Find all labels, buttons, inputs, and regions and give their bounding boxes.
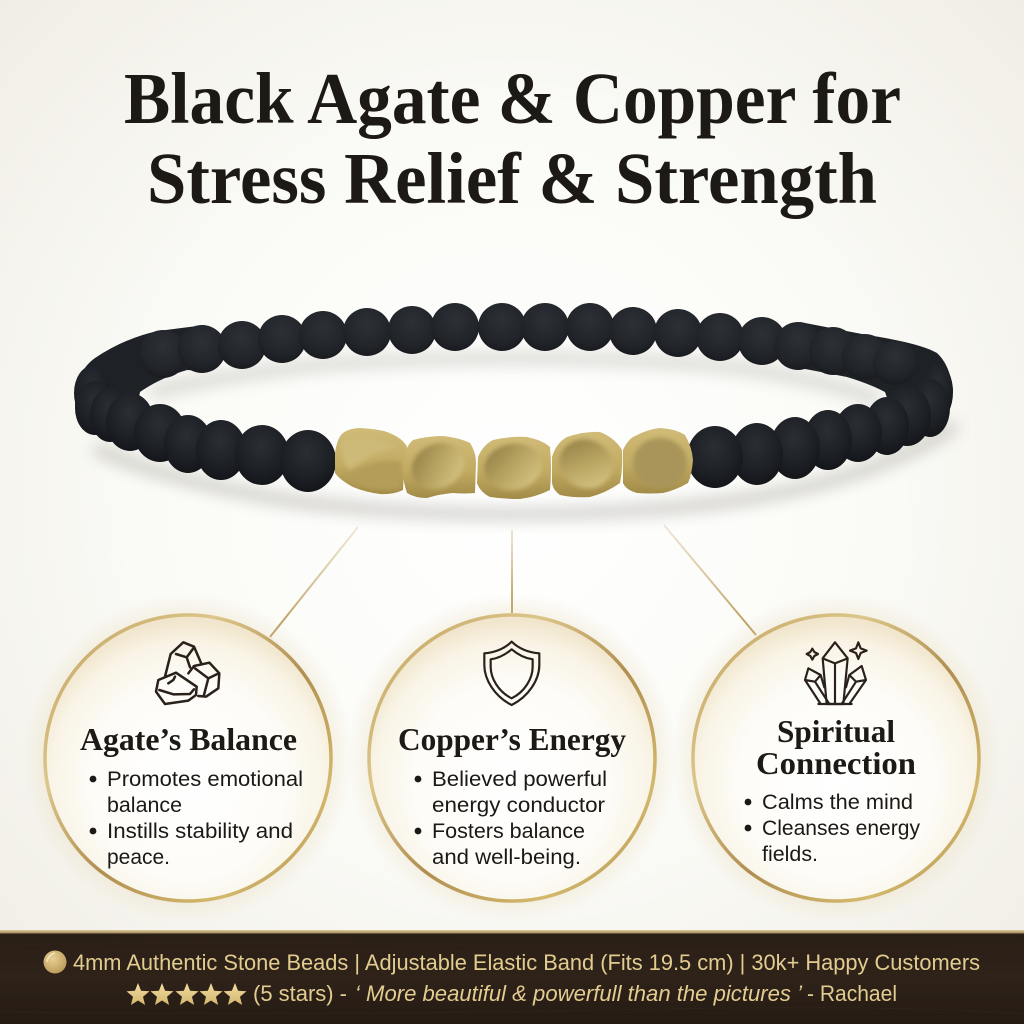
left end mass xyxy=(75,325,205,440)
title: Black Agate & Copper for xyxy=(124,58,901,139)
bracelet xyxy=(74,303,955,514)
icon: shield xyxy=(484,642,539,705)
title xyxy=(124,58,901,219)
review text: - Rachael xyxy=(807,981,897,1006)
front row of black agate beads, right xyxy=(687,364,953,488)
copper bead 1 xyxy=(335,428,407,494)
list: agate benefits: balance xyxy=(107,793,182,817)
list: agate benefits: Promotes emotional xyxy=(107,767,303,791)
icon: agate stones xyxy=(156,642,219,704)
review text: (5 stars) - xyxy=(253,981,347,1006)
copper bead 4 xyxy=(552,432,622,497)
title: Stress Relief & Strength xyxy=(147,138,877,219)
list: spiritual benefits: fields. xyxy=(762,842,818,866)
panel: copper's energy xyxy=(347,593,677,923)
list: copper benefits: Believed powerful xyxy=(432,767,607,791)
footer band xyxy=(0,930,1024,1024)
copper bead 3 xyxy=(477,437,551,499)
icon: gold bead xyxy=(44,950,66,974)
heading: spiritual connection xyxy=(756,713,916,781)
list: spiritual benefits xyxy=(745,790,920,866)
right end mass xyxy=(800,322,953,435)
review text xyxy=(253,981,897,1006)
copper bead 2 xyxy=(403,435,476,498)
back row of black agate beads xyxy=(139,303,917,385)
leader line: copper xyxy=(511,530,513,613)
front row of black agate beads, left xyxy=(74,366,336,492)
heading: spiritual connection: Connection xyxy=(756,745,916,781)
leader line: spiritual xyxy=(664,525,756,635)
rating stars xyxy=(126,983,246,1005)
heading: agate's balance: Agate’s Balance xyxy=(80,721,297,757)
copper bead 5 xyxy=(623,428,693,494)
footer line 1: 4mm Authentic Stone Beads | Adjustable Elastic Band (Fits 19.5 cm) | 30k+ Happy Customers xyxy=(73,950,980,975)
bracelet shadow xyxy=(95,358,955,514)
list: copper benefits: Fosters balance xyxy=(432,819,585,843)
panel: spiritual connection xyxy=(671,593,1001,923)
list: spiritual benefits: Calms the mind xyxy=(762,790,913,814)
leader line: agate xyxy=(270,527,358,637)
icon: crystals xyxy=(805,642,867,704)
list: copper benefits: energy conductor xyxy=(432,793,605,817)
list: agate benefits xyxy=(90,767,303,869)
review text: ‘ More beautiful & powerfull than the pictures ’ xyxy=(355,981,803,1006)
list: agate benefits: Instills stability and xyxy=(107,819,293,843)
heading: copper's energy: Copper’s Energy xyxy=(398,721,626,757)
heading: spiritual connection: Spiritual xyxy=(777,713,895,749)
panel: agate's balance xyxy=(23,593,353,923)
list: spiritual benefits: Cleanses energy xyxy=(762,816,920,840)
list: agate benefits: peace. xyxy=(107,845,170,869)
list: copper benefits xyxy=(415,767,607,869)
list: copper benefits: and well-being. xyxy=(432,845,581,869)
